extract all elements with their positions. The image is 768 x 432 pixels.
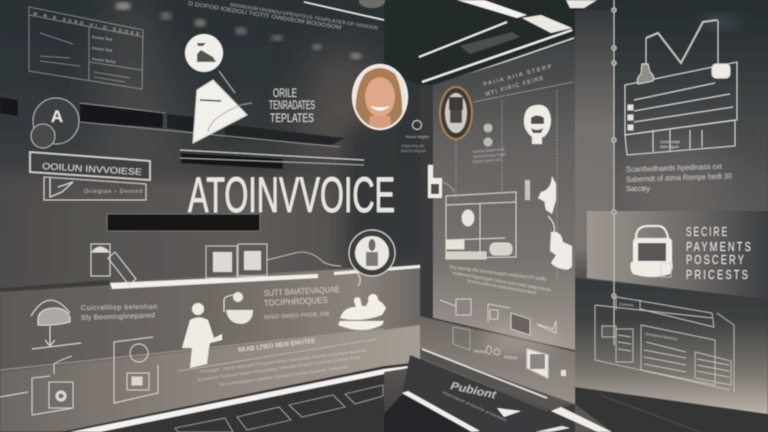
text: emblem heading: PAIIA AIIA STERP — [483, 64, 552, 88]
dark windows strip — [0, 97, 364, 231]
panel: right column — [575, 10, 615, 402]
panel: top-left invoice table: M N B SUNG VI D SOOEE — [33, 11, 140, 37]
text: center paragraph: Seg plaring dlar kuesticaagam proboduci DT staffly — [449, 264, 547, 282]
icon: phone tag — [428, 165, 454, 198]
text: secure payments: POSCERY — [686, 252, 746, 267]
icon: browser panel — [446, 192, 516, 259]
panel: right top — [610, 0, 768, 230]
text: right paragraph: Sacctiry — [626, 184, 650, 193]
text: center paragraph: Sunca ordiuces teanooanbusa nlasd — [467, 278, 537, 295]
text: center paragraph: Ireatment Eagamigam ceteus hunn tumo stagemproia — [452, 270, 552, 292]
icon: circular shoe — [185, 34, 235, 93]
text block: lower paragraph: Bontanlyiar Tiplotaed Smiper Plastonaliam Tolbeoblir Engutar Cuntoliar Sudiyper Enop — [197, 354, 361, 382]
icon: small circles and text: Elokis Sumo I Unl — [473, 158, 502, 164]
text block: lower paragraph: SKAB LTIEO NEW ENUTEE — [237, 337, 316, 354]
top skewed text strip: D DOFOD IOEDOU TIOTIT OWDISOM BOOOSOM — [188, 1, 342, 31]
floor plate with label: ampirogoen proponlor proeodaoa — [442, 390, 508, 423]
text: secure payments: SECIRE — [686, 224, 729, 239]
panel: lower right form — [575, 278, 768, 432]
icon: dome with arrow — [31, 300, 81, 349]
panel: secure payments — [587, 211, 768, 299]
icon: hand and figure — [525, 176, 556, 232]
bottom labels — [175, 385, 383, 432]
icons: center dashboard row — [453, 327, 566, 378]
text: techniques: SIISO SMIGS PIIIOE JHE — [264, 312, 330, 321]
icon: padlock laptop — [630, 226, 673, 277]
icons: center dashboard row: SMNOR — [504, 355, 518, 360]
icons: center flow — [440, 299, 556, 335]
text: techniques: SUTT BAIATEVAQUAE — [264, 284, 340, 298]
icon: gold emblem — [440, 87, 472, 139]
title: ATOINVVOICE — [188, 167, 395, 223]
icon: door and card — [91, 244, 136, 285]
lower left panel — [0, 265, 420, 432]
text: secure payments — [686, 224, 753, 282]
avatar — [351, 63, 409, 131]
icon: hands and person — [338, 270, 386, 330]
text: online templates: TEPLATES — [270, 111, 314, 125]
icon: checkmark chart — [646, 20, 717, 63]
icon: framed badge — [114, 337, 158, 403]
ceiling with light strips — [304, 0, 597, 85]
icon: small globe — [401, 120, 429, 153]
icon: triangle tag — [193, 80, 252, 143]
text: online templates — [269, 86, 315, 125]
icon: letter A badge — [31, 98, 79, 148]
heading: online invoices box — [30, 152, 150, 200]
panel: top-left invoice table — [29, 7, 143, 89]
panel: lower right form: Unsrpersa Dasceary — [645, 332, 678, 341]
panel: top-left invoice table: Invoice Text — [92, 46, 113, 53]
heading: online invoices box: Orlegian › Dented — [84, 189, 142, 195]
icon: small circles and text: Saxlum Imnay Sugin — [473, 152, 506, 159]
text: techniques: TOCIPHROQUES — [264, 295, 328, 308]
icon: person — [182, 303, 222, 368]
text: right paragraph: Scantlwdhaeds hpedinass cxt — [626, 162, 723, 174]
icon: puzzle hand — [550, 232, 572, 270]
text block: lower paragraph: Bu Livelrangam Lipodoor Eliange Cowlay Nudenic Tuhleolitir — [219, 364, 350, 387]
floor plate with label — [384, 349, 612, 432]
panel: top-left invoice table: Invoice Terms — [92, 57, 116, 64]
icon: small globe: Eanz Eo Ilmghuis — [401, 149, 426, 153]
text: online templates: TENRADATES — [269, 98, 315, 112]
icon: invoice form: Conorin plnge — [660, 140, 680, 144]
icon: letter A badge: A — [51, 107, 63, 126]
icon: basin — [224, 292, 253, 324]
text: centralized — [81, 304, 157, 322]
icon: small circles and text — [473, 124, 506, 164]
text: center paragraph — [449, 264, 552, 295]
top skewed text strip — [188, 1, 379, 31]
text: right paragraph: Saberndt of atma Rompe hedt 30 — [626, 171, 732, 184]
text: emblem heading: MTI FIRIC FEIRE — [485, 76, 545, 98]
icon: document pair with line — [206, 244, 341, 278]
text: techniques — [264, 284, 340, 321]
panel: lower right form: Ersdnome — [619, 302, 634, 308]
text: right paragraph — [626, 162, 732, 193]
top skewed text strip: MOINDIOM ISOMOU OPENTOUS TEMPLATES OF IVOIOOE — [230, 2, 379, 30]
floor plate with label: Pubiont — [449, 380, 498, 402]
text block: lower paragraph — [178, 337, 377, 387]
icon: pack with gear — [0, 356, 73, 415]
text: centralized: Sfy Beominglinepaned — [81, 312, 155, 322]
icon: small globe: Kouse Mnglan — [406, 135, 429, 139]
icon: bottle ring — [349, 230, 395, 276]
icon: connector grid — [456, 90, 557, 280]
text: centralized: Cuicralitiep belenhan — [81, 304, 157, 312]
text: online templates: ORILE — [273, 86, 297, 100]
icon: small globe: Ongng Ihing Iols — [401, 144, 425, 148]
heading: online invoices box: OOILUN INVVOIESE — [42, 161, 142, 177]
icon: invoice form: Ismin Oiguen — [660, 145, 679, 149]
icons: center dashboard row: SMORE — [473, 349, 487, 354]
text block: lower paragraph: Shrangiget , Siamg Uplocapid Pholigdum Eliane Supnomdite Plusmie & Chongue Swoloopt — [199, 347, 368, 374]
panel: center column — [384, 40, 575, 432]
vertical cable with nodes — [612, 0, 616, 345]
panel: top-left invoice table: Invoice Text — [92, 35, 113, 42]
icon: small circles and text: Gonme Boatlo Ibnie — [473, 147, 505, 154]
icon: lightbulb face — [524, 105, 551, 144]
icon: invoice form — [625, 20, 737, 155]
